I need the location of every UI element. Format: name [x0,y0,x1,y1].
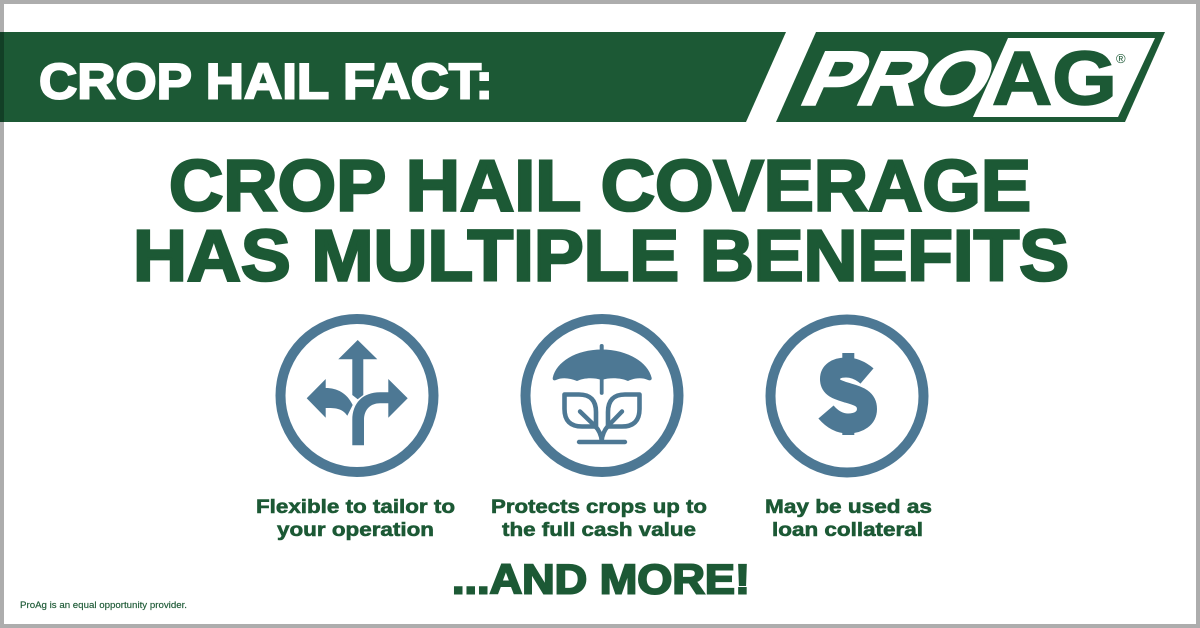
icon: umbrella over plant [526,319,678,472]
ProAg logo [776,32,1165,122]
main title [133,147,1069,297]
icon: dollar sign [770,320,924,472]
banner heading: CROP HAIL FACT: [39,52,493,110]
caption: collateral: May be used as [765,496,932,518]
logo word PRO: PRO [790,36,1010,121]
registered mark: ® [1116,51,1126,66]
icon: diverging arrows [280,319,434,472]
caption: collateral [765,496,932,541]
caption: flexible: Flexible to tailor to [256,496,455,518]
caption: collateral: loan collateral [772,519,923,541]
logo word AG: AG [992,36,1117,122]
caption: protects: the full cash value [502,519,696,541]
main title: HAS MULTIPLE BENEFITS [133,217,1069,297]
header banner [0,32,786,122]
caption: protects: Protects crops up to [491,496,707,518]
caption: flexible: your operation [277,519,434,541]
caption: protects [491,496,707,541]
caption: flexible [256,496,455,541]
footer disclaimer: ProAg is an equal opportunity provider. [20,600,187,611]
main title: CROP HAIL COVERAGE [169,147,1031,227]
closing line: ...AND MORE! [452,556,750,602]
